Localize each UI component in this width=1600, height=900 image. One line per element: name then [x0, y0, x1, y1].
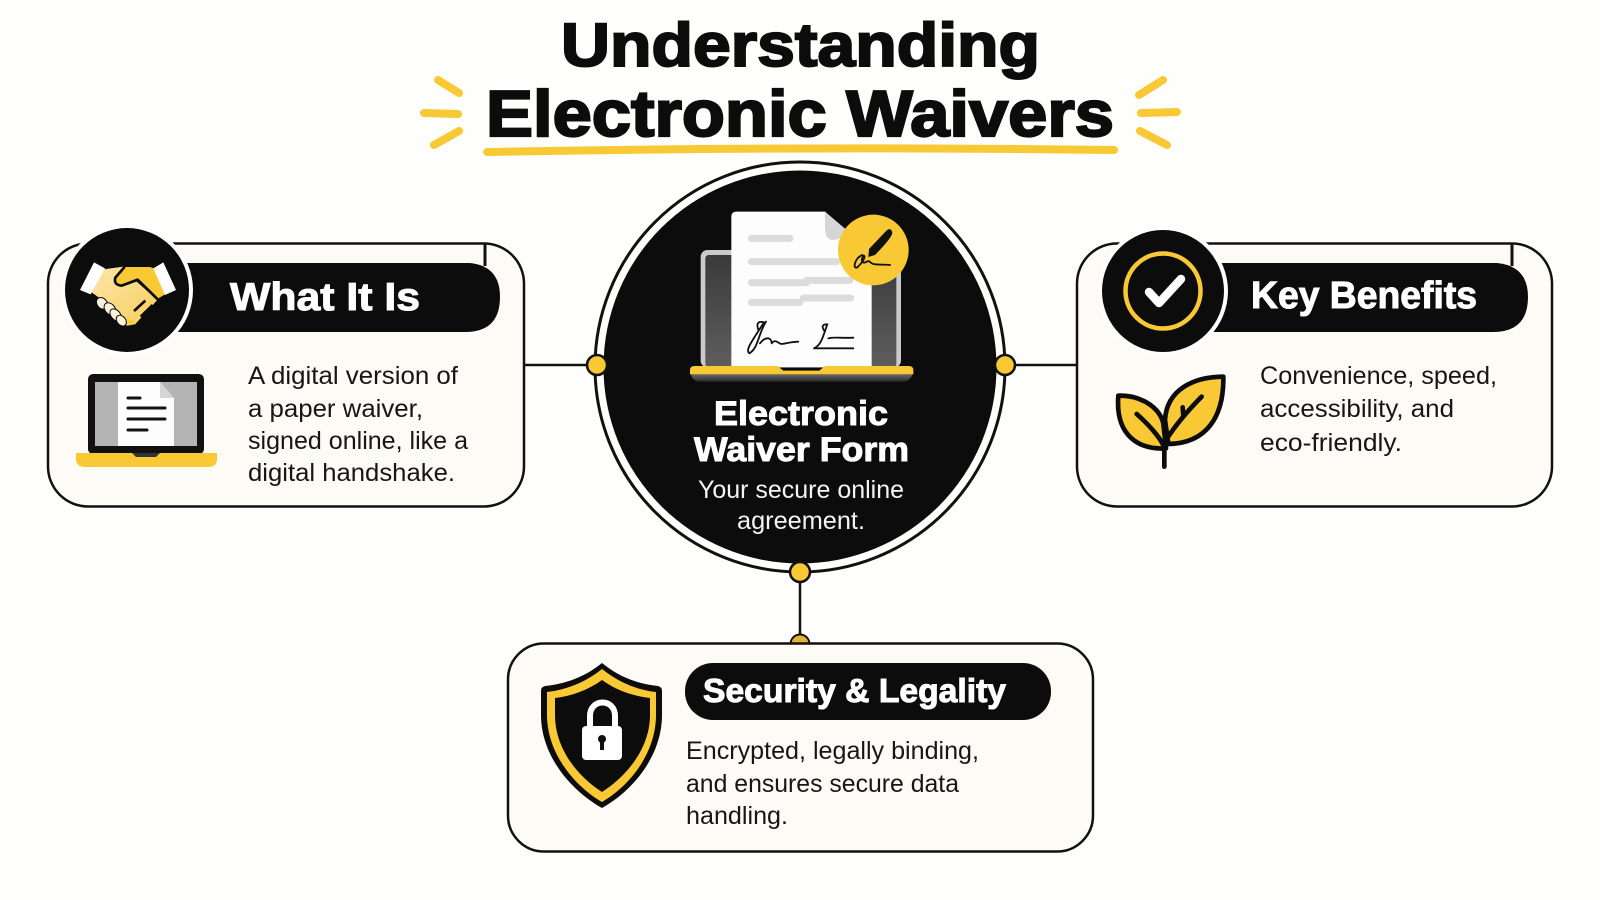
- header pill: [1180, 263, 1528, 332]
- outer ring: [595, 162, 1005, 572]
- connector: hub to right card: [1004, 364, 1077, 366]
- title line one: Understanding: [561, 11, 1040, 79]
- icon: shield with padlock: [541, 663, 662, 808]
- body text: and ensures secure data: [686, 770, 959, 798]
- body text: [248, 362, 468, 487]
- panel: electronic waiver form hub: [587, 162, 1015, 582]
- body text: accessibility, and: [1260, 395, 1454, 423]
- heading: Key Benefits: [1251, 275, 1477, 317]
- icon: laptop with document: [76, 374, 217, 467]
- body text: signed online, like a: [248, 427, 468, 455]
- body text: a paper waiver,: [248, 395, 423, 423]
- left sparks: [424, 80, 459, 145]
- connector dot: bottom: [790, 562, 810, 582]
- connector dot: right: [995, 355, 1015, 375]
- hub heading: Electronic: [714, 395, 888, 433]
- badge: pen signature: [838, 215, 909, 285]
- hub subtitle: agreement.: [737, 507, 865, 535]
- header tab tick: [1510, 244, 1514, 266]
- panel: what it is: [48, 224, 524, 506]
- body text: A digital version of: [248, 362, 458, 390]
- card background: [1077, 244, 1552, 506]
- right sparks: [1139, 80, 1177, 145]
- hub subtitle: Your secure online: [698, 476, 904, 504]
- icon: leaves: [1118, 377, 1223, 467]
- hub disc: [604, 170, 996, 564]
- hub heading: [694, 395, 909, 469]
- title line two: Electronic Waivers: [486, 77, 1114, 150]
- illustration: document on laptop: [690, 212, 913, 382]
- header pill: [685, 663, 1051, 720]
- connector end dot: [790, 634, 810, 654]
- hub subtitle: [698, 476, 904, 535]
- body text: [686, 737, 979, 830]
- body text: eco-friendly.: [1260, 429, 1402, 457]
- card background: [508, 644, 1093, 852]
- body text: [1260, 362, 1497, 457]
- header tab tick: [484, 244, 486, 266]
- connector dot: left: [587, 355, 607, 375]
- icon: handshake badge: [61, 224, 193, 356]
- body text: Convenience, speed,: [1260, 362, 1497, 390]
- panel: key benefits: [1077, 226, 1552, 506]
- body text: Encrypted, legally binding,: [686, 737, 979, 765]
- connector: hub to bottom card: [799, 572, 801, 643]
- panel: security and legality: [508, 644, 1093, 852]
- hub heading: Waiver Form: [694, 431, 909, 469]
- heading: Security & Legality: [703, 672, 1007, 709]
- card background: [48, 244, 524, 506]
- icon: check badge: [1098, 226, 1228, 356]
- title: [424, 11, 1177, 152]
- header pill: [150, 263, 500, 332]
- heading: What It Is: [230, 276, 420, 319]
- body text: handling.: [686, 802, 788, 830]
- title underline: [487, 148, 1114, 152]
- connector: left card to hub: [524, 364, 597, 366]
- body text: digital handshake.: [248, 459, 455, 487]
